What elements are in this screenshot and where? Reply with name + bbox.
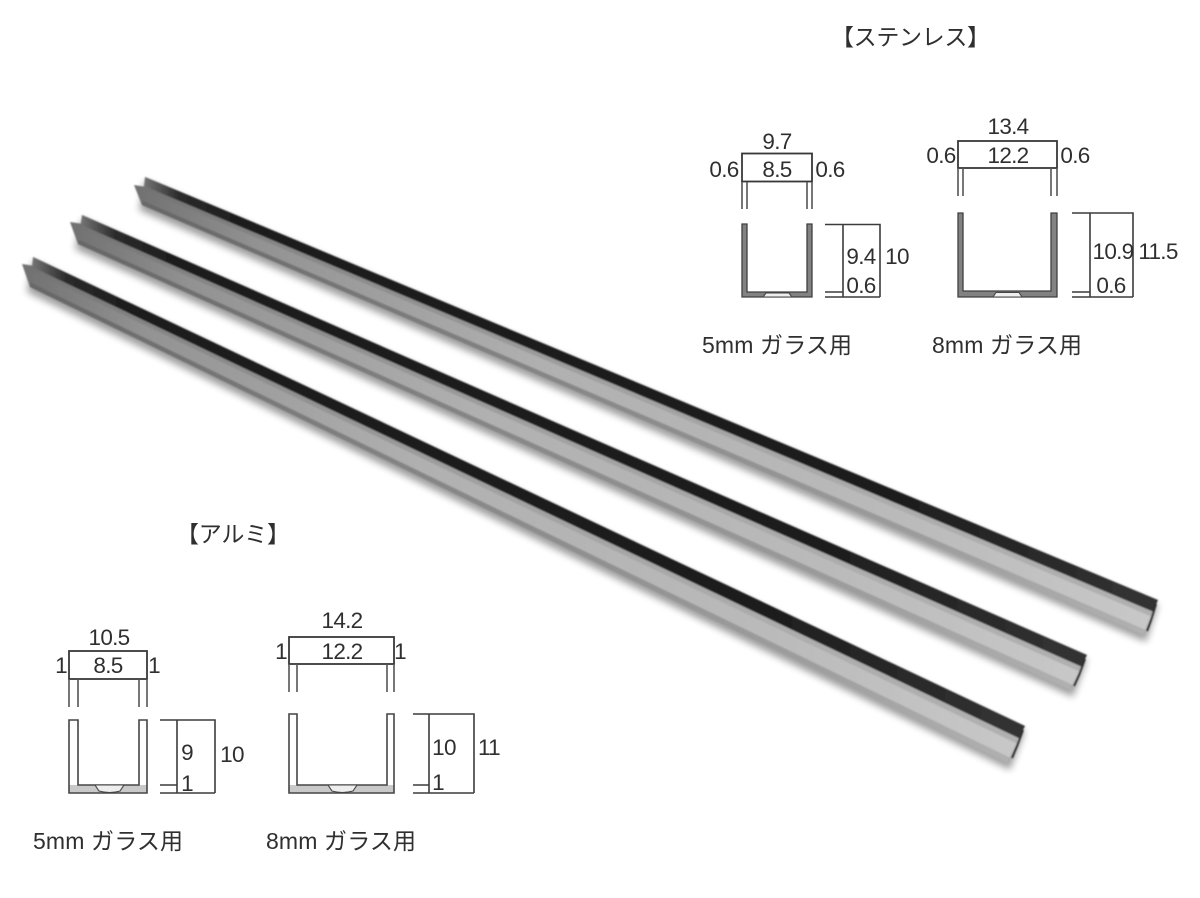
caption: aluminium 8mm: 8mm ガラス用 bbox=[266, 828, 416, 854]
caption: stainless 8mm: 8mm ガラス用 bbox=[932, 332, 1082, 358]
height dimensions: stainless 8mm: 11.5 bbox=[1138, 239, 1178, 264]
top view: aluminium 8mm: 1 bbox=[275, 639, 287, 664]
height dimensions: stainless 5mm: 10 bbox=[885, 244, 909, 269]
height dimensions: stainless 5mm bbox=[825, 224, 909, 298]
height dimensions: aluminium 5mm: 1 bbox=[181, 771, 193, 796]
height dimensions: stainless 5mm: 0.6 bbox=[846, 273, 876, 298]
caption: aluminium 5mm: 5mm ガラス用 bbox=[33, 828, 183, 854]
top view: stainless 5mm: 9.7 bbox=[762, 129, 792, 154]
cross-section: aluminium 5mm bbox=[69, 720, 147, 793]
top view: stainless 5mm: 0.6 bbox=[815, 157, 845, 182]
height dimensions: stainless 8mm: 0.6 bbox=[1096, 273, 1126, 298]
height dimensions: aluminium 8mm: 10 bbox=[432, 735, 456, 760]
top view: aluminium 8mm: 1 bbox=[394, 639, 406, 664]
top view: aluminium 5mm: 1 bbox=[55, 653, 67, 678]
diagram: stainless 8mm bbox=[926, 114, 1178, 298]
cross-section: aluminium 8mm bbox=[289, 714, 394, 793]
top view: stainless 5mm bbox=[709, 129, 845, 209]
height dimensions: aluminium 5mm bbox=[160, 720, 244, 796]
height dimensions: aluminium 8mm: 1 bbox=[432, 770, 444, 795]
channel bar: bottom bbox=[22, 257, 1025, 770]
top view: aluminium 8mm bbox=[275, 608, 406, 692]
diagram: stainless 5mm bbox=[709, 129, 909, 298]
top view: stainless 8mm bbox=[926, 114, 1090, 196]
height dimensions: aluminium 5mm: 9 bbox=[181, 740, 193, 765]
cross-section: stainless 5mm bbox=[742, 224, 812, 297]
height dimensions: stainless 8mm bbox=[1072, 213, 1178, 298]
height dimensions: aluminium 8mm bbox=[413, 714, 500, 795]
caption: stainless 5mm: 5mm ガラス用 bbox=[702, 332, 852, 358]
diagram: aluminium 8mm bbox=[275, 608, 500, 795]
diagram: aluminium 5mm bbox=[55, 625, 244, 796]
cross-section: stainless 8mm bbox=[958, 213, 1057, 297]
top view: stainless 5mm: 8.5 bbox=[762, 157, 792, 182]
height dimensions: stainless 8mm: 10.9 bbox=[1092, 239, 1134, 264]
top view: aluminium 8mm: 14.2 bbox=[322, 608, 363, 633]
top view: stainless 8mm: 12.2 bbox=[988, 143, 1029, 168]
top view: aluminium 5mm: 8.5 bbox=[93, 653, 123, 678]
top view: stainless 8mm: 0.6 bbox=[926, 143, 956, 168]
channel bar: top bbox=[134, 177, 1158, 642]
top view: stainless 5mm: 0.6 bbox=[709, 157, 739, 182]
top view: aluminium 5mm: 1 bbox=[148, 653, 160, 678]
top view: aluminium 5mm: 10.5 bbox=[88, 625, 130, 650]
top view: stainless 8mm: 13.4 bbox=[988, 114, 1029, 139]
top view: aluminium 5mm bbox=[55, 625, 160, 707]
top view: stainless 8mm: 0.6 bbox=[1060, 143, 1090, 168]
height dimensions: aluminium 8mm: 11 bbox=[478, 735, 500, 760]
top view: aluminium 8mm: 12.2 bbox=[322, 639, 363, 664]
heading: aluminium: 【アルミ】 bbox=[176, 521, 290, 547]
heading: stainless: 【ステンレス】 bbox=[831, 24, 990, 50]
height dimensions: stainless 5mm: 9.4 bbox=[846, 244, 876, 269]
channel bar: middle bbox=[70, 215, 1087, 697]
height dimensions: aluminium 5mm: 10 bbox=[220, 742, 244, 767]
